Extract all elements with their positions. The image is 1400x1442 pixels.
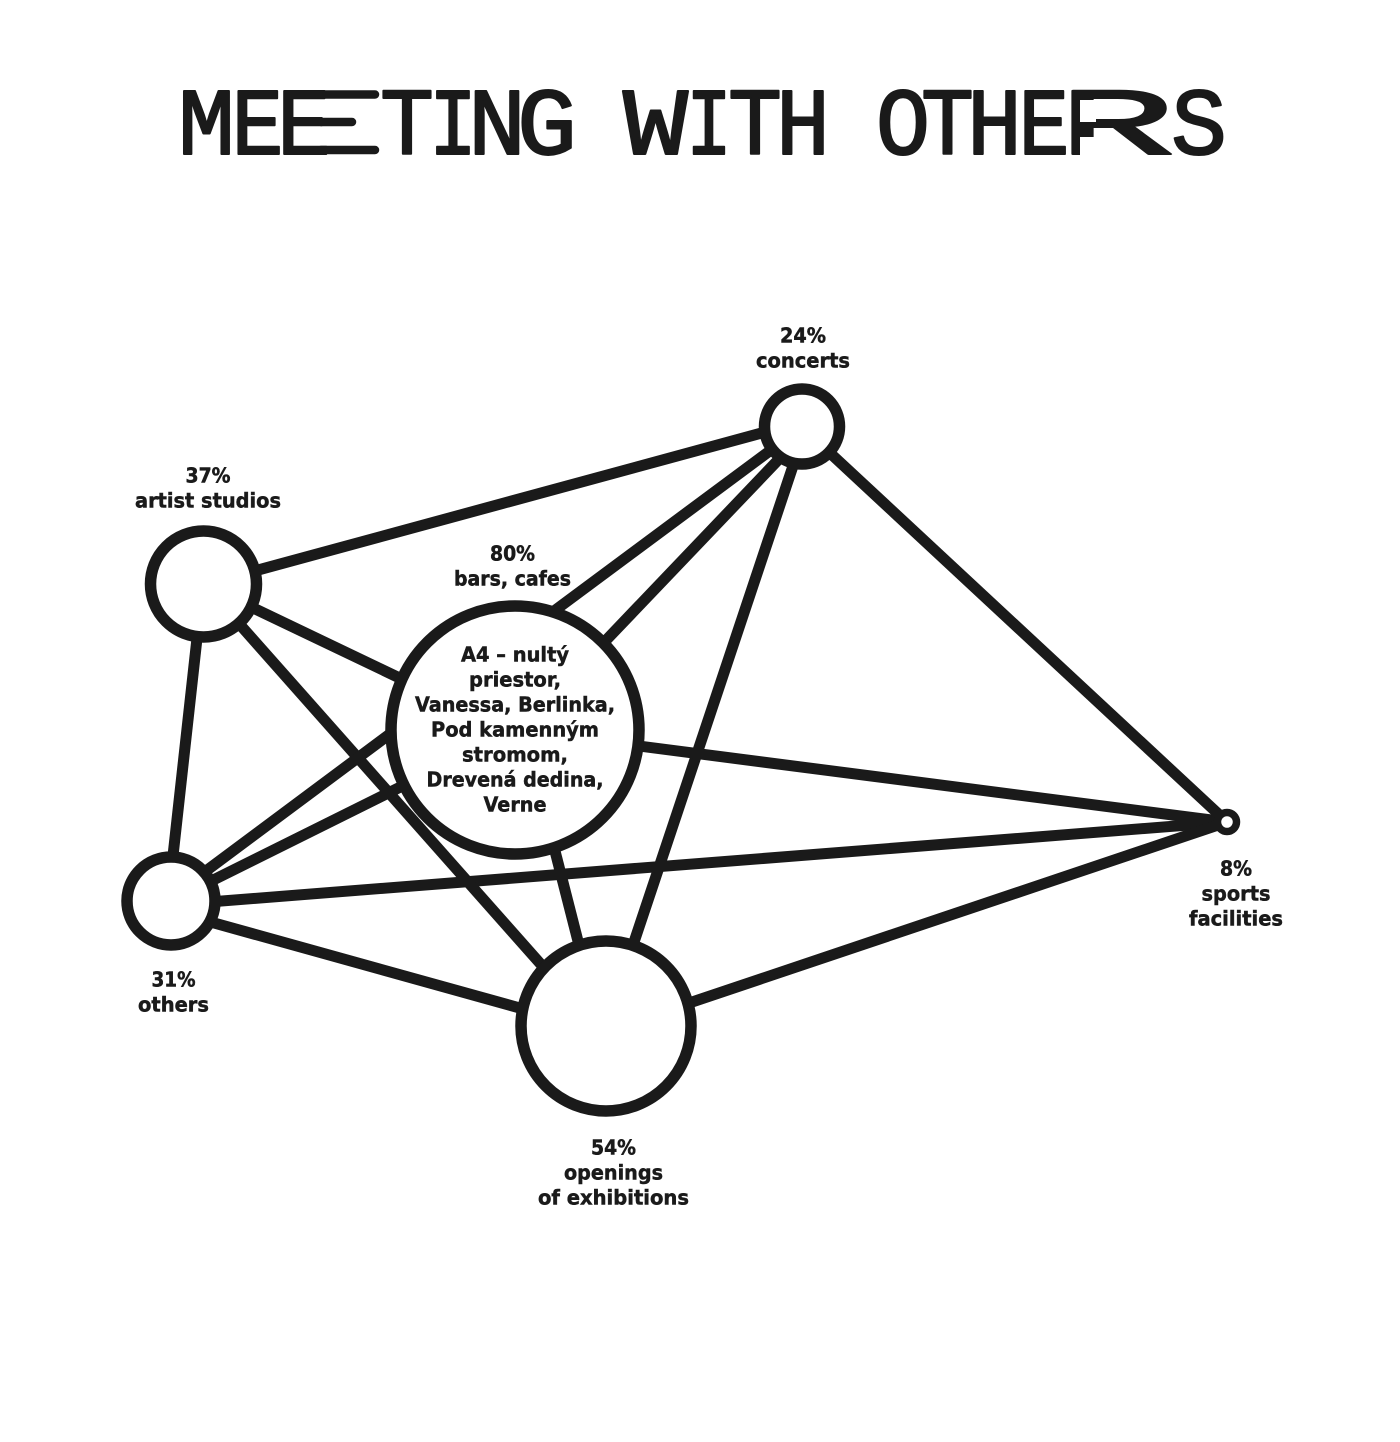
- network diagram: [127, 389, 1236, 1111]
- label: concerts: [756, 324, 850, 372]
- title: N: [468, 74, 526, 183]
- text: venues inside central circle: A4 – nultý: [461, 642, 569, 666]
- title: S: [1171, 74, 1227, 183]
- text: venues inside central circle: Vanessa, Berlinka,: [415, 692, 615, 716]
- title: O: [876, 74, 930, 183]
- text: venues inside central circle: priestor,: [469, 668, 561, 692]
- title: E: [1018, 74, 1070, 183]
- title: T: [728, 74, 782, 183]
- title: E: [277, 74, 331, 183]
- node: bars, cafes: [391, 606, 639, 854]
- node: sports facilities: [1218, 812, 1236, 832]
- label: artist studios: artist studios: [135, 488, 281, 512]
- label: concerts: concerts: [756, 348, 850, 372]
- label: bars, cafes: [454, 542, 571, 590]
- label: concerts: 24%: [780, 324, 826, 348]
- label: artist studios: [135, 464, 281, 512]
- title: R: [1058, 74, 1175, 183]
- title: G: [517, 74, 577, 183]
- label: openings of exhibitions: 54%: [591, 1136, 636, 1160]
- label: openings of exhibitions: of exhibitions: [538, 1186, 689, 1210]
- title: I: [686, 74, 732, 183]
- label: others: others: [138, 992, 209, 1016]
- label: sports facilities: facilities: [1189, 906, 1283, 930]
- text: venues inside central circle: Drevená dedina,: [426, 768, 604, 792]
- title: T: [921, 74, 974, 183]
- label: artist studios: 37%: [186, 464, 230, 488]
- title: H: [776, 74, 830, 183]
- title: [178, 74, 1227, 183]
- label: openings of exhibitions: openings: [564, 1160, 663, 1184]
- node: concerts: [764, 389, 840, 464]
- title: M: [178, 74, 235, 183]
- title: W: [623, 74, 688, 183]
- connecting lines: [168, 422, 1227, 1032]
- title: I: [429, 74, 477, 183]
- text: venues inside central circle: stromom,: [462, 742, 568, 766]
- label: openings of exhibitions: [538, 1136, 689, 1210]
- label: bars, cafes: bars, cafes: [454, 566, 571, 590]
- node: others: [127, 857, 215, 945]
- node: artist studios: [150, 531, 256, 637]
- title: H: [967, 74, 1022, 183]
- label: sports facilities: [1189, 856, 1283, 930]
- label: sports facilities: 8%: [1220, 856, 1252, 880]
- title: E: [232, 74, 284, 183]
- label: bars, cafes: 80%: [490, 542, 535, 566]
- title: T: [380, 74, 434, 183]
- text: venues inside central circle: Verne: [484, 792, 546, 816]
- label: sports facilities: sports: [1202, 882, 1270, 906]
- label: others: 31%: [152, 968, 196, 992]
- text: venues inside central circle: [415, 642, 615, 816]
- text: venues inside central circle: Pod kamenným: [431, 718, 599, 742]
- node: openings of exhibitions: [521, 941, 691, 1111]
- label: others: [138, 968, 209, 1016]
